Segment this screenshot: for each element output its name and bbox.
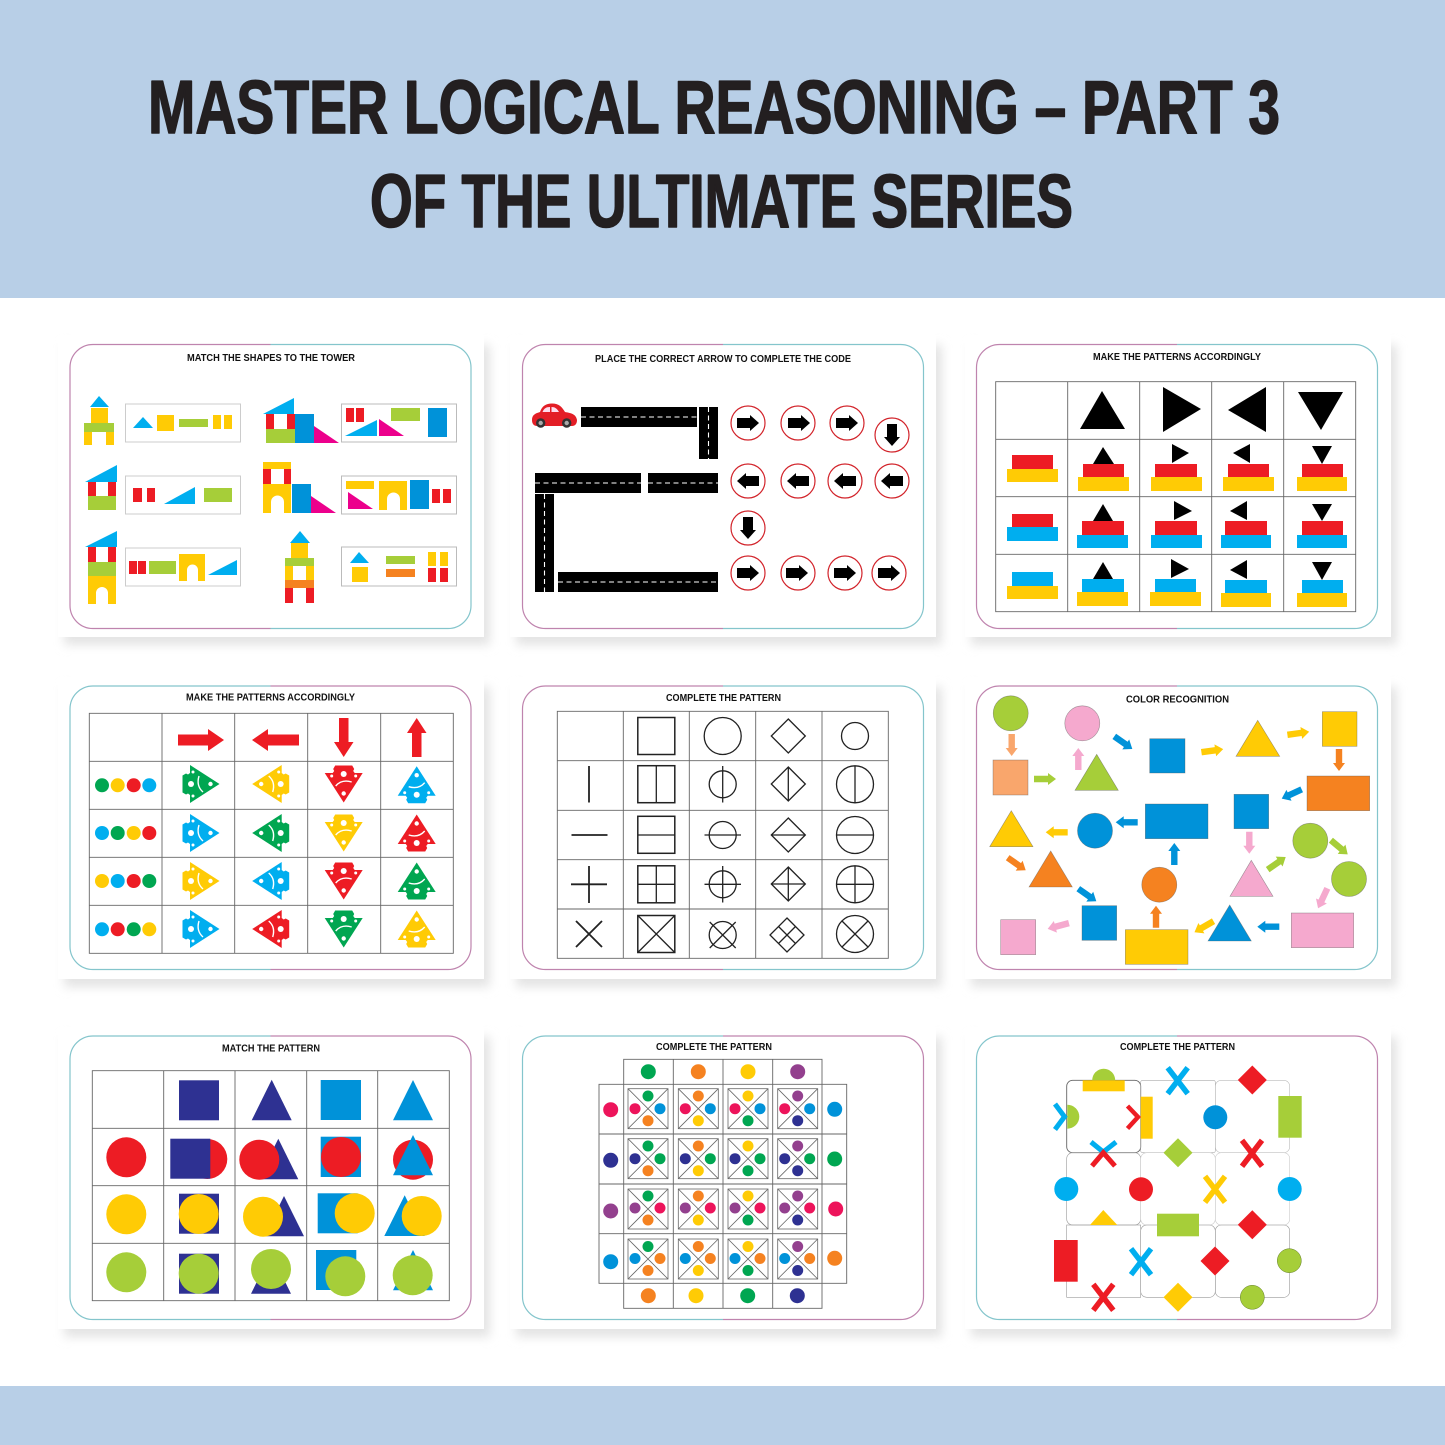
panel: make the patterns (black triangles) bbox=[965, 335, 1397, 645]
line figures bbox=[571, 718, 874, 952]
red direction arrows bbox=[178, 718, 426, 757]
title bbox=[148, 65, 1280, 243]
heading: PLACE THE CORRECT ARROW TO COMPLETE THE CODE bbox=[595, 354, 851, 365]
header band bbox=[0, 0, 1445, 298]
shape box 5 bbox=[126, 548, 240, 586]
panel: complete the pattern (line figures) bbox=[510, 677, 942, 987]
heading: MAKE THE PATTERNS ACCORDINGLY bbox=[186, 692, 355, 704]
outer colour dots bbox=[603, 1064, 843, 1303]
shape box 2 bbox=[342, 404, 456, 442]
green circle row bbox=[106, 1249, 433, 1296]
yellow circle row bbox=[106, 1193, 442, 1237]
shapes bbox=[990, 696, 1370, 964]
panel: complete the pattern (dots grid) bbox=[510, 1027, 942, 1337]
heading: MATCH THE PATTERN bbox=[222, 1044, 320, 1055]
shape box 1 bbox=[126, 404, 240, 442]
edge shapes bbox=[1054, 1066, 1302, 1312]
footer band bbox=[0, 1386, 1445, 1445]
tower 3 bbox=[85, 465, 117, 510]
crossed tiles bbox=[628, 1089, 818, 1279]
header shapes bbox=[179, 1080, 433, 1120]
grid bbox=[557, 711, 888, 958]
shape box 6 bbox=[342, 547, 456, 586]
icon: red car bbox=[532, 404, 577, 428]
tower 1 bbox=[84, 396, 114, 445]
title: OF THE ULTIMATE SERIES bbox=[370, 159, 1073, 243]
grid bbox=[599, 1059, 847, 1308]
header triangles bbox=[1080, 387, 1343, 432]
tower 2 bbox=[263, 398, 339, 443]
heading: COMPLETE THE PATTERN bbox=[656, 1042, 772, 1053]
road track bbox=[535, 407, 718, 592]
stacks row 2 bbox=[1007, 501, 1347, 548]
heading: COMPLETE THE PATTERN bbox=[666, 693, 781, 704]
heading: MAKE THE PATTERNS ACCORDINGLY bbox=[1093, 352, 1261, 363]
grid bbox=[89, 713, 453, 953]
arrowhead pieces bbox=[182, 765, 436, 948]
tower 6 bbox=[285, 531, 314, 603]
panel: complete the pattern (tile edges) bbox=[965, 1027, 1397, 1337]
arrow tiles bbox=[731, 406, 909, 590]
panel: match the shapes to the tower bbox=[58, 335, 490, 645]
tile outlines bbox=[1067, 1080, 1290, 1297]
shape box 4 bbox=[342, 476, 456, 514]
stacks row 3 bbox=[1007, 559, 1347, 607]
heading: MATCH THE SHAPES TO THE TOWER bbox=[187, 353, 356, 364]
heading: COLOR RECOGNITION bbox=[1126, 694, 1229, 706]
shape box 3 bbox=[126, 476, 240, 514]
red circle row bbox=[106, 1135, 433, 1180]
tower 4 bbox=[263, 462, 336, 513]
panel: place the correct arrow bbox=[510, 335, 942, 645]
flow arrows bbox=[1004, 726, 1352, 937]
grid bbox=[996, 382, 1356, 612]
panel: make the patterns (coloured arrowheads) bbox=[58, 677, 490, 987]
panel: match the pattern bbox=[58, 1027, 490, 1337]
colour dot rows bbox=[95, 778, 156, 936]
stacks row 1 bbox=[1007, 444, 1347, 491]
grid bbox=[92, 1071, 449, 1301]
panel: color recognition bbox=[965, 677, 1397, 987]
heading: COMPLETE THE PATTERN bbox=[1120, 1042, 1235, 1053]
tower 5 bbox=[85, 531, 117, 604]
